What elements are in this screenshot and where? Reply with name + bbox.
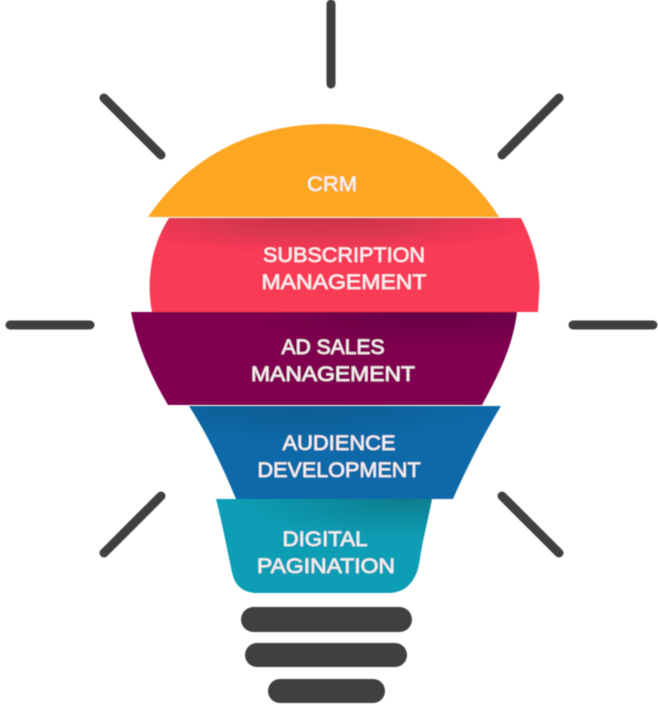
label: digital pagination: [257, 528, 395, 578]
band: digital pagination: [216, 499, 432, 593]
label: audience development: [258, 432, 421, 482]
rays: [10, 4, 653, 553]
label: ad sales management: AD SALES: [282, 336, 384, 359]
band: CRM: [148, 124, 499, 217]
band: ad sales management: [131, 312, 517, 405]
bulb base: [241, 607, 412, 703]
label: subscription management: [262, 244, 427, 294]
label: subscription management: MANAGEMENT: [262, 271, 427, 294]
label: digital pagination: DIGITAL: [282, 528, 368, 551]
label: subscription management: SUBSCRIPTION: [263, 244, 425, 267]
label: ad sales management: MANAGEMENT: [251, 363, 415, 386]
label: digital pagination: PAGINATION: [257, 555, 395, 578]
label: ad sales management: [251, 336, 415, 386]
label: audience development: AUDIENCE: [282, 432, 396, 455]
band: subscription management: [150, 218, 539, 312]
label: audience development: DEVELOPMENT: [258, 459, 421, 482]
band: audience development: [189, 406, 501, 499]
label: CRM: CRM: [307, 173, 357, 196]
